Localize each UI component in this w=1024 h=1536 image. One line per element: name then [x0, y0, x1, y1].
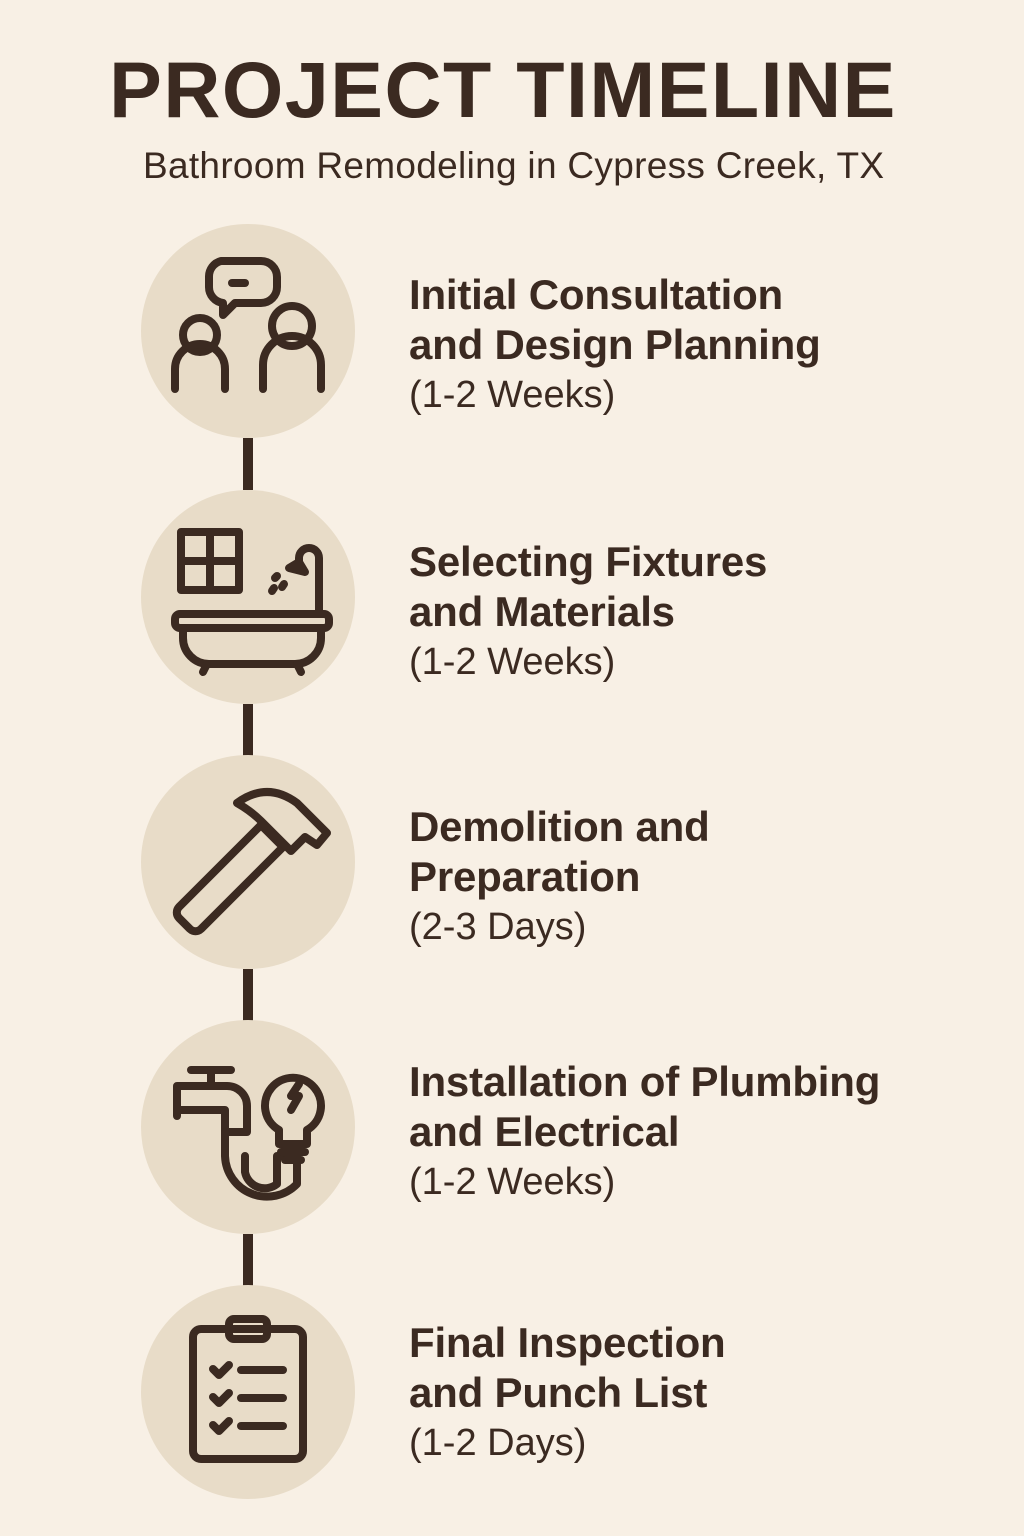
- step 1 text: (1-2 Weeks): [409, 374, 615, 416]
- step 1 text: Initial Consultation: [409, 271, 783, 318]
- step 5 text: and Punch List: [409, 1369, 707, 1416]
- step 4 icon: plumbing and electrical: [141, 1020, 355, 1234]
- connectors: [243, 438, 253, 1286]
- step 4 text: [409, 1058, 880, 1203]
- step 2 text: (1-2 Weeks): [409, 641, 615, 683]
- step 2 text: Selecting Fixtures: [409, 538, 767, 585]
- step 1 text: and Design Planning: [409, 321, 821, 368]
- step 4 text: Installation of Plumbing: [409, 1058, 880, 1105]
- step 5 text: [409, 1319, 726, 1464]
- step 5 text: (1-2 Days): [409, 1422, 586, 1464]
- step 3 text: (2-3 Days): [409, 906, 586, 948]
- step 3 text: [409, 803, 710, 948]
- step 2 text: [409, 538, 767, 683]
- step 4 text: and Electrical: [409, 1108, 679, 1155]
- step 1 icon: consultation: [141, 224, 355, 438]
- step 5 icon: clipboard: [141, 1285, 355, 1499]
- step 5 text: Final Inspection: [409, 1319, 726, 1366]
- step 2 icon: bathtub: [141, 490, 355, 704]
- step 1 text: [409, 271, 821, 416]
- title: PROJECT TIMELINE: [109, 45, 897, 134]
- step 2 text: and Materials: [409, 588, 675, 635]
- step 3 icon: hammer: [141, 755, 355, 969]
- step 3 text: Demolition and: [409, 803, 710, 850]
- subtitle: Bathroom Remodeling in Cypress Creek, TX: [143, 145, 884, 186]
- step 3 text: Preparation: [409, 853, 640, 900]
- step 4 text: (1-2 Weeks): [409, 1161, 615, 1203]
